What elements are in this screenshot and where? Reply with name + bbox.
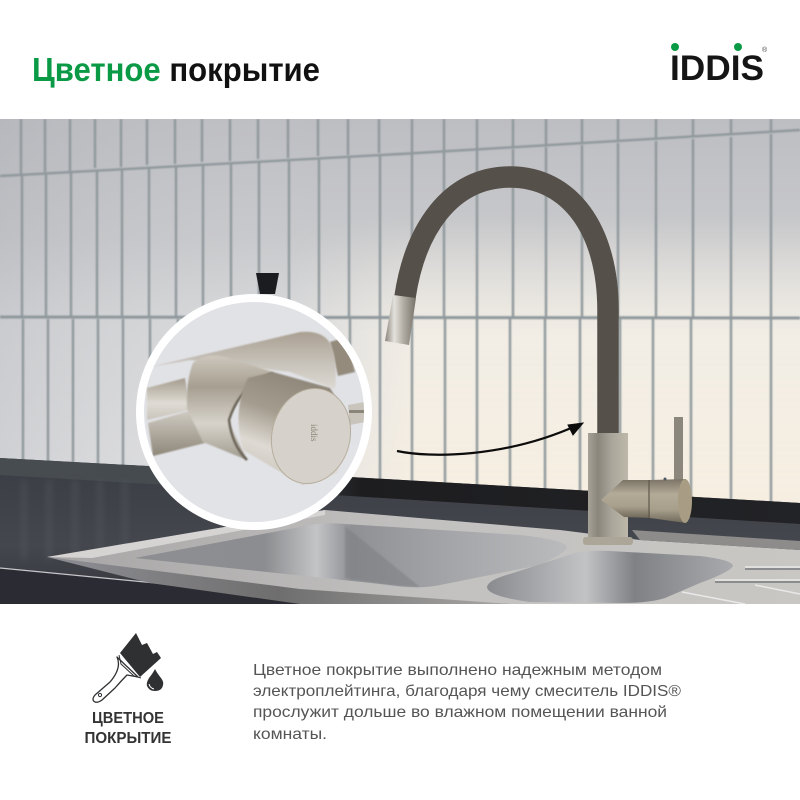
groove xyxy=(229,373,273,460)
kitchen photo scene xyxy=(0,119,800,604)
icon label: ЦВЕТНОЕ xyxy=(92,710,164,727)
sink small bowl xyxy=(487,551,733,603)
paint drop xyxy=(147,669,163,691)
engraved logo: iddis xyxy=(309,424,319,442)
zoom circle: handle close-up xyxy=(136,294,372,535)
tiled wall xyxy=(0,119,800,519)
brush head xyxy=(120,633,161,677)
icon label xyxy=(84,710,172,747)
faucet base xyxy=(588,433,628,539)
faucet handle xyxy=(601,480,650,518)
title: Цветное покрытие xyxy=(32,51,320,88)
thin rod xyxy=(348,402,365,425)
icon label: ПОКРЫТИЕ xyxy=(84,730,172,747)
description text: Цветное покрытие выполнено надежным методом xyxy=(253,662,662,679)
logo: IDDIS: IDDIS xyxy=(670,49,764,88)
counter and dark upstand xyxy=(0,458,800,604)
sink xyxy=(47,510,800,604)
brush handle xyxy=(93,657,138,702)
cap cylinder xyxy=(239,372,350,485)
description text: комнаты. xyxy=(253,726,327,743)
end face xyxy=(271,388,352,484)
faucet nozzle xyxy=(385,295,416,345)
description text: электроплейтинга, благодаря чему смеситель IDDIS® xyxy=(253,683,681,700)
left pipe xyxy=(147,378,190,420)
faucet lever xyxy=(674,417,683,485)
description text xyxy=(253,662,681,743)
main body xyxy=(187,355,273,460)
description text: прослужит дольше во влажном помещении ванной xyxy=(253,704,667,721)
icon: paint brush with drop xyxy=(93,633,163,702)
black stopper knob xyxy=(256,273,279,294)
rear cylinder xyxy=(150,332,336,389)
logo: IDDIS: ® xyxy=(762,46,768,54)
callout arrow xyxy=(397,423,583,455)
faucet hose xyxy=(405,177,608,434)
faucet xyxy=(385,177,692,545)
small rear collar xyxy=(330,337,355,376)
sink main bowl xyxy=(135,523,567,587)
